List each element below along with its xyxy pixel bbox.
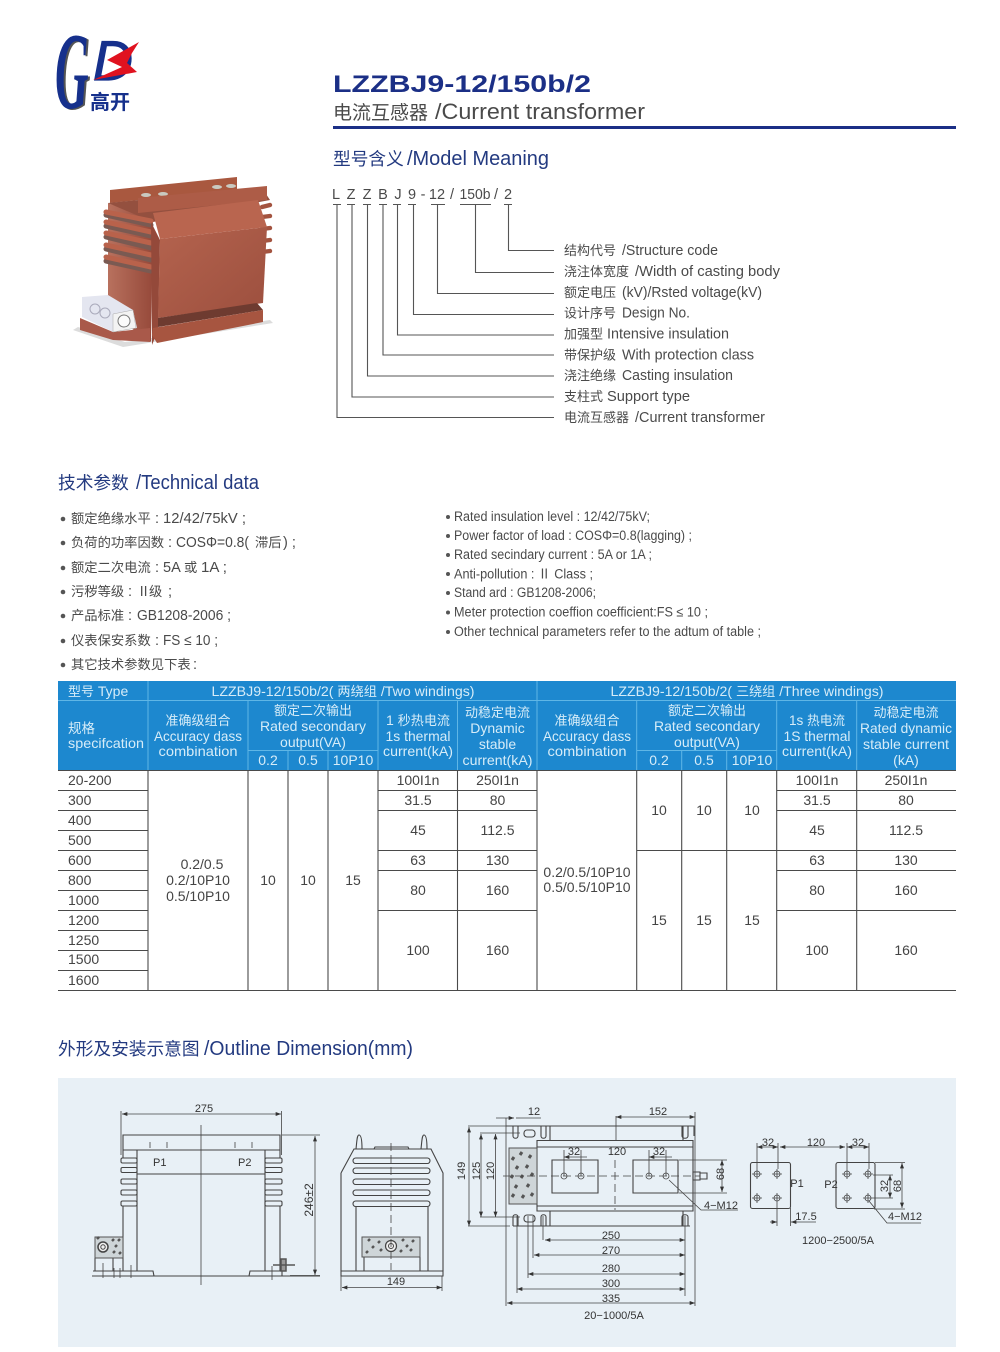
Chinese technical data list: 5A — [163, 560, 181, 576]
heading: technical data: /Technical data — [136, 472, 260, 494]
first column specs: 800 — [68, 872, 92, 888]
drawing: top view: 68 — [715, 1168, 727, 1180]
two windings values: 15 — [345, 872, 361, 888]
three windings values: 10 — [744, 802, 760, 818]
header row 2, two windings: Dynamic — [470, 720, 525, 736]
leader labels: 带保护级 — [564, 348, 616, 362]
subtitle — [333, 99, 645, 124]
header row 2, three windings: Rated dynamic — [860, 720, 952, 736]
three windings values: 45 — [809, 822, 825, 838]
heading: technical data: 技术参数 — [58, 473, 129, 493]
panel: outline drawings — [58, 1078, 956, 1347]
two windings values: 0.5/10P10 — [166, 888, 230, 904]
header row 2, two windings: Rated secondary — [260, 718, 366, 734]
Chinese technical data list — [61, 511, 296, 673]
Chinese technical data list: ) ; — [283, 535, 296, 551]
Chinese technical data list: : — [155, 560, 159, 576]
three windings values: 250I1n — [885, 772, 927, 788]
two windings values: 250I1n — [476, 772, 519, 788]
Chinese technical data list: 1A ; — [201, 560, 227, 576]
two windings values: 80 — [410, 882, 426, 898]
drawing: terminal plates: 32 — [852, 1137, 864, 1149]
drawing: top view: 12 — [528, 1106, 540, 1118]
Chinese technical data list: 额定二次电流 — [71, 560, 151, 575]
two windings values: 130 — [486, 852, 509, 868]
three windings values: 15 — [651, 912, 667, 928]
header row 2, three windings: 0.2 — [649, 752, 669, 768]
first column specs: 600 — [68, 852, 92, 868]
Chinese technical data list: 12/42/75kV ; — [163, 511, 246, 527]
subtitle: /Current transformer — [435, 99, 645, 124]
drawing: top view — [456, 1106, 738, 1322]
three windings values: 160 — [894, 882, 918, 898]
Chinese technical data list: 仪表保安系数 — [71, 633, 151, 648]
dimensions: vertical — [469, 1127, 496, 1226]
Chinese technical data list: Ⅱ — [137, 584, 150, 599]
header row 2, two windings: 1s thermal — [386, 728, 450, 744]
three windings values — [543, 772, 927, 958]
leader labels: /Width of casting body — [635, 264, 781, 280]
labels P1 P2 — [153, 1157, 251, 1169]
drawing: terminal plates: 32 — [879, 1180, 891, 1192]
Chinese technical data list: COSΦ=0.8( — [176, 535, 249, 551]
Chinese technical data list: 额定绝缘水平 — [71, 511, 151, 526]
Chinese technical data list: : — [128, 584, 132, 600]
header row 2, three windings: current(kA) — [782, 743, 852, 759]
two windings values: 0.2/0.5 — [181, 856, 224, 872]
two windings values: 45 — [410, 822, 426, 838]
Chinese technical data list: : — [193, 657, 197, 673]
header row 2, three windings: 0.5 — [694, 752, 714, 768]
drawing: terminal plates: 68 — [892, 1180, 904, 1192]
leader labels: 浇注绝缘 — [564, 368, 616, 383]
heading: model meaning: /Model Meaning — [407, 148, 549, 170]
header row 2, two windings: 准确级组合 — [165, 713, 231, 728]
first column specs: 500 — [68, 832, 92, 848]
Chinese technical data list: 负荷的功率因数 — [71, 534, 164, 550]
heading: outline dimension — [58, 1038, 413, 1060]
header row 1: LZZBJ9-12/150b/2( 三绕组 /Three windings) — [610, 683, 884, 699]
leader lines — [333, 204, 554, 418]
Chinese technical data list: : — [155, 511, 159, 527]
Chinese technical data list: : — [168, 535, 172, 551]
Chinese technical data list: 滞后 — [255, 535, 282, 550]
heading: model meaning — [333, 148, 549, 170]
leader labels: Support type — [607, 389, 690, 405]
main title: LZZBJ9-12/150b/2 — [333, 71, 591, 98]
two windings values: 100I1n — [397, 772, 439, 788]
three windings values: 0.2/0.5/10P10 — [543, 864, 631, 880]
drawing: terminal plates: 32 — [762, 1137, 774, 1149]
header row 2, two windings: output(VA) — [280, 734, 346, 750]
first column specs: 1500 — [68, 951, 99, 967]
English technical data list: Stand ard : GB1208-2006; — [454, 585, 596, 600]
logo: 高开 — [90, 90, 130, 114]
product photo: current transformer — [73, 177, 273, 347]
first column specs: 300 — [68, 792, 92, 808]
three windings values: 80 — [809, 882, 825, 898]
first column specs: 20-200 — [68, 772, 112, 788]
Chinese technical data list: 或 — [184, 560, 197, 575]
drawing: top view: 120 — [485, 1162, 497, 1180]
English technical data list: Rated insulation level : 12/42/75kV; — [454, 509, 650, 524]
drawing: top view: 149 — [456, 1162, 468, 1180]
three windings values: 10 — [651, 802, 667, 818]
first column specs: 1250 — [68, 932, 99, 948]
header row 1 — [68, 683, 884, 699]
two windings values: 63 — [410, 852, 426, 868]
header row 2, two windings: 10P10 — [333, 752, 373, 768]
header row 2, three windings: 1S thermal — [784, 728, 850, 744]
Chinese technical data list: FS ≤ 10 ; — [163, 633, 218, 649]
model code letters: Z — [363, 187, 372, 203]
two windings values: 112.5 — [480, 822, 515, 838]
model code letters: 2 — [504, 187, 512, 203]
leader labels: /Structure code — [622, 243, 718, 259]
drawing: top view: 250 — [602, 1230, 620, 1242]
heading: model meaning: 型号含义 — [333, 149, 404, 169]
drawing: terminal plates: 17.5 — [795, 1211, 817, 1223]
three windings values: 100I1n — [796, 772, 838, 788]
leader labels: 额定电压 — [564, 285, 616, 300]
logo: D — [93, 30, 133, 92]
three windings values: 15 — [696, 912, 712, 928]
Chinese technical data list: 产品标准 — [71, 608, 124, 623]
leader labels: 浇注体宽度 — [564, 264, 629, 279]
three windings values: 80 — [898, 792, 914, 808]
drawing: terminal plates: 1200−2500/5A — [802, 1235, 875, 1247]
header row 2, two windings: current(kA) — [383, 743, 453, 759]
leader labels: 结构代号 — [564, 243, 616, 258]
dimension: 246±2 — [302, 1136, 316, 1275]
header row 2, two windings: Accuracy dass — [154, 728, 242, 744]
model code breakdown diagram — [332, 187, 781, 426]
three windings values: 10 — [696, 802, 712, 818]
model code letters: Z — [347, 187, 356, 203]
heading: outline dimension: 外形及安装示意图 — [58, 1039, 200, 1059]
header row 2, three windings: combination — [548, 743, 626, 759]
English technical data list: Other technical parameters refer to the adtum of table ; — [454, 624, 761, 639]
drawing: top view: 335 — [602, 1293, 620, 1305]
dimension: 275: 275 — [195, 1103, 213, 1115]
two windings values: 160 — [486, 882, 509, 898]
Chinese technical data list: 其它技术参数见下表 — [71, 656, 191, 672]
header row 2, three windings: 动稳定电流 — [873, 705, 939, 720]
model code letters: / — [450, 187, 455, 203]
three windings values: 31.5 — [803, 792, 831, 808]
three windings values: 15 — [744, 912, 760, 928]
drawing: top view: 152 — [649, 1106, 667, 1118]
dimension: 149: 149 — [387, 1276, 405, 1288]
model code letters: / — [494, 187, 499, 203]
header row 2, two windings: 动稳定电流 — [465, 705, 530, 720]
leader labels: /Current transformer — [635, 410, 765, 426]
leader labels: Intensive insulation — [607, 326, 729, 342]
table header background — [58, 681, 956, 771]
three windings values: 0.5/0.5/10P10 — [543, 879, 631, 895]
two windings values — [166, 772, 519, 958]
three windings values: 130 — [894, 852, 918, 868]
leader labels — [564, 243, 781, 426]
model code letters — [332, 187, 512, 203]
English technical data list: Power factor of load : COSΦ=0.8(lagging) ; — [454, 528, 692, 543]
drawing: terminal plates: P2 — [824, 1179, 838, 1191]
table grid — [58, 770, 956, 990]
drawing: top view: 4−M12 — [704, 1200, 738, 1212]
dimensions: horizontal — [496, 1117, 738, 1303]
labels P1 P2: P1 — [153, 1157, 166, 1169]
drawing: terminal plates: 120 — [807, 1137, 825, 1149]
header row 2, two windings: 0.2 — [258, 752, 278, 768]
two windings values: 10 — [260, 872, 276, 888]
heading: technical data — [58, 472, 260, 494]
leader labels: 加强型 — [564, 326, 603, 342]
header row 2, two windings: 规格 — [68, 721, 95, 736]
header row 1: 型号 Type — [68, 683, 128, 699]
header row 2, two windings: combination — [158, 743, 238, 759]
first column specs: 1200 — [68, 912, 99, 928]
Chinese technical data list: 级 — [149, 584, 162, 599]
header row 2, two windings: 额定二次输出 — [274, 703, 352, 718]
drawing: top view: 125 — [471, 1162, 483, 1180]
header row 2, two windings: 1 秒热电流 — [386, 712, 450, 728]
drawing: front view — [92, 1103, 320, 1285]
two windings values: 100 — [406, 942, 430, 958]
header row 1: LZZBJ9-12/150b/2( 两绕组 /Two windings) — [212, 683, 474, 699]
model code letters: - — [421, 187, 426, 203]
English technical data list: Meter protection coeffion coefficient:FS ≤ 10 ; — [454, 604, 708, 620]
English technical data list — [446, 509, 761, 639]
header row 2, three windings: stable current — [863, 736, 949, 752]
Chinese technical data list: ; — [168, 584, 172, 600]
drawing: terminal plates: 4−M12 — [888, 1211, 922, 1223]
two windings values: 0.2/10P10 — [166, 872, 230, 888]
drawing: side view — [341, 1135, 443, 1291]
drawing: top view: 20−1000/5A — [584, 1310, 644, 1322]
three windings values: 100 — [805, 942, 829, 958]
leader labels: 电流互感器 — [564, 410, 629, 425]
header row 2, three windings: Accuracy dass — [543, 728, 631, 744]
three windings values: 160 — [894, 942, 918, 958]
model code letters: 9 — [408, 187, 416, 203]
drawing: top view: 280 — [602, 1263, 620, 1275]
two windings values: 10 — [300, 872, 316, 888]
three windings values: 63 — [809, 852, 825, 868]
drawing: terminal plates — [750, 1137, 922, 1247]
leader labels: 支柱式 — [564, 389, 603, 404]
Chinese technical data list: : — [155, 633, 159, 649]
leader labels: Casting insulation — [622, 368, 733, 384]
model code letters: J — [394, 187, 402, 203]
heading: outline dimension: /Outline Dimension(mm) — [204, 1038, 413, 1060]
first column specs: 1000 — [68, 892, 99, 908]
leader labels: Design No. — [622, 306, 690, 322]
English technical data list: Rated secindary current : 5A or 1A ; — [454, 547, 652, 562]
header row 2, two windings: current(kA) — [462, 752, 532, 768]
Chinese technical data list: : — [128, 608, 132, 624]
header row 2, two windings: 0.5 — [298, 752, 318, 768]
drawing: top view: 270 — [602, 1245, 620, 1257]
leader labels: (kV)/Rsted voltage(kV) — [622, 285, 762, 301]
labels P1 P2: P2 — [238, 1157, 251, 1169]
drawing: top view: 120 — [608, 1146, 626, 1158]
header row 2, two windings: stable — [479, 736, 516, 752]
leader labels: With protection class — [622, 348, 754, 364]
three windings values: 112.5 — [889, 822, 923, 838]
header row 2, three windings: 1s 热电流 — [789, 712, 845, 728]
model code letters: B — [378, 187, 388, 203]
header row 2, three windings: Rated secondary — [654, 718, 760, 734]
header row 2, three windings: 10P10 — [732, 752, 772, 768]
Chinese technical data list: GB1208-2006 ; — [137, 608, 231, 624]
model code letters: L — [332, 187, 340, 203]
specification table — [58, 681, 956, 990]
header row 2, two windings: specifcation — [68, 735, 144, 751]
drawing: top view: 32 — [653, 1146, 665, 1158]
dimension: 149 — [342, 1276, 442, 1288]
two windings values: 160 — [486, 942, 509, 958]
header row 2, three windings: (kA) — [893, 752, 919, 768]
two windings values: 31.5 — [404, 792, 432, 808]
drawing: top view: 300 — [602, 1278, 620, 1290]
header row 2, three windings: 额定二次输出 — [668, 703, 746, 718]
header row 2, three windings: output(VA) — [674, 734, 740, 750]
title rule — [333, 126, 956, 129]
leader labels: 设计序号 — [564, 306, 616, 320]
dimension: 246±2: 246±2 — [302, 1183, 316, 1217]
English technical data list: Anti-pollution : Ⅱ Class ; — [454, 566, 593, 582]
drawing: terminal plates: P1 — [790, 1178, 804, 1190]
logo: G — [55, 12, 89, 133]
header row 2, two windings — [68, 703, 532, 768]
subtitle: 电流互感器 — [333, 102, 428, 124]
model code letters: 12 — [429, 187, 445, 203]
logo: G — [57, 13, 91, 134]
first column specs: 400 — [68, 812, 92, 828]
Chinese technical data list: 污秽等级 — [71, 583, 124, 599]
first column specs: 1600 — [68, 972, 99, 988]
model code letters: 150b — [460, 187, 490, 203]
two windings values: 80 — [490, 792, 505, 808]
first column specs — [68, 772, 112, 988]
header row 2, three windings — [543, 703, 952, 768]
drawing: top view: 32 — [568, 1146, 580, 1158]
header row 2, three windings: 准确级组合 — [554, 713, 620, 728]
logo — [55, 12, 139, 134]
